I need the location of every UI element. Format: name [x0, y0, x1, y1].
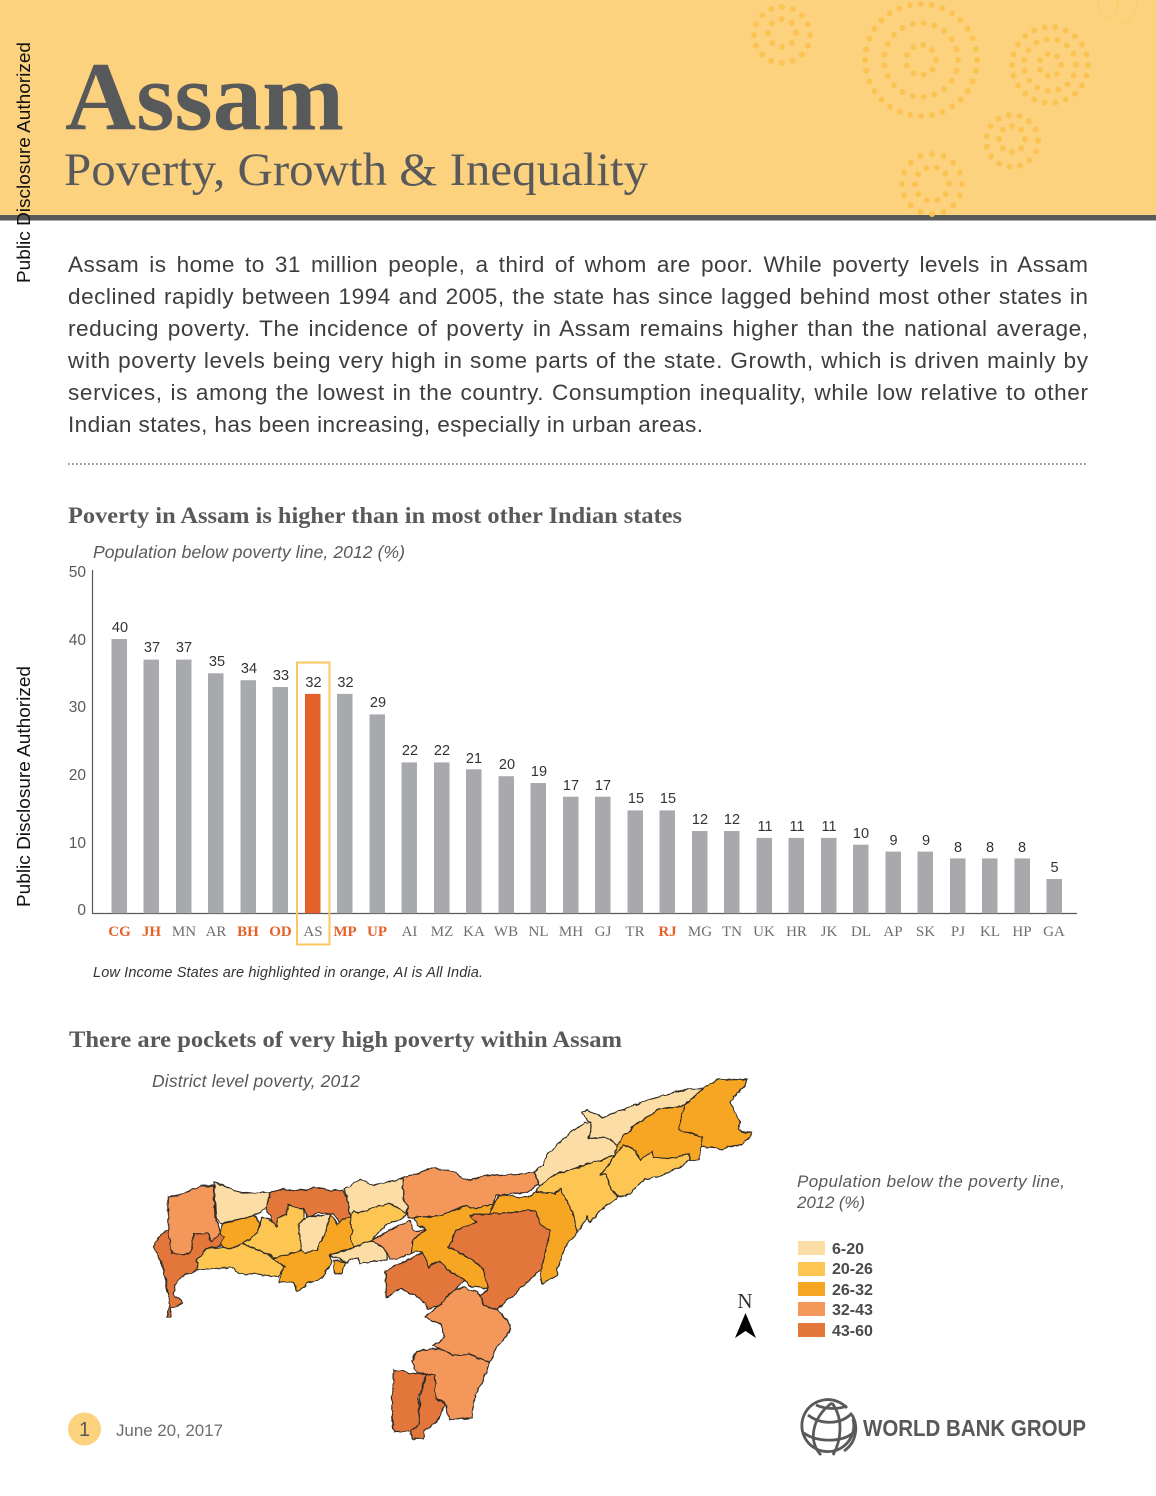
- state labels: GA: [1043, 924, 1065, 940]
- state labels: CG: [108, 924, 131, 940]
- y axis labels: 0: [77, 902, 86, 919]
- intro paragraph: Assam is home to 31 million people, a third of whom are poor. While poverty levels in Assam: [68, 252, 1088, 277]
- value labels: 22: [402, 743, 418, 759]
- icon: globe: [802, 1400, 856, 1455]
- state labels: DL: [851, 924, 871, 940]
- north arrow: [735, 1289, 756, 1338]
- value labels: 8: [1018, 840, 1026, 856]
- page number: [68, 1412, 101, 1446]
- highlight box: Assam: [297, 662, 330, 944]
- state labels: TR: [625, 924, 645, 940]
- intro paragraph: [67, 252, 1089, 437]
- decorative dotted spirals: [754, 4, 1088, 214]
- state labels: KA: [463, 924, 485, 940]
- state labels: KL: [980, 924, 1000, 940]
- state labels: TN: [722, 924, 742, 940]
- header banner: [0, 0, 1156, 220]
- value labels: 32: [337, 675, 354, 691]
- bar chart: [69, 564, 1077, 944]
- state labels: MZ: [431, 924, 453, 940]
- value labels: 37: [176, 640, 192, 656]
- legend items: 26-32: [832, 1282, 873, 1299]
- value labels: 17: [563, 778, 579, 794]
- state labels: MG: [688, 924, 712, 940]
- legend items: 20-26: [832, 1261, 873, 1278]
- state labels: PJ: [951, 924, 965, 940]
- side stamp: top: Public Disclosure Authorized: [14, 42, 34, 283]
- intro paragraph: Indian states, has been increasing, especially in urban areas.: [68, 412, 703, 437]
- value labels: 22: [434, 743, 450, 759]
- value labels: 20: [499, 757, 515, 773]
- state labels: GJ: [595, 924, 611, 940]
- legend: [796, 1172, 1065, 1340]
- value labels: 8: [986, 840, 994, 856]
- state labels: HR: [786, 924, 807, 940]
- y axis labels: 10: [69, 835, 86, 852]
- y axis labels: [69, 564, 86, 919]
- heading: poverty chart: Poverty in Assam is higher than in most other Indian states: [68, 503, 682, 528]
- legend items: 43-60: [832, 1323, 873, 1340]
- value labels: 10: [853, 826, 869, 842]
- intro paragraph: with poverty levels being very high in some parts of the state. Growth, which is driven mainly by: [67, 348, 1089, 373]
- value labels: 12: [724, 812, 740, 828]
- wordmark: WORLD BANK GROUP: [863, 1415, 1086, 1441]
- value labels: [112, 620, 1059, 876]
- value labels: 40: [112, 620, 128, 636]
- value labels: 15: [660, 791, 676, 807]
- value labels: 5: [1050, 860, 1059, 876]
- state labels: UK: [753, 924, 775, 940]
- value labels: 37: [144, 640, 160, 656]
- state labels: OD: [269, 924, 292, 940]
- north arrow: N: [737, 1289, 753, 1313]
- state labels: JH: [142, 924, 161, 940]
- state labels: MP: [333, 924, 357, 940]
- state labels: HP: [1012, 924, 1032, 940]
- value labels: 17: [595, 778, 611, 794]
- value labels: 9: [889, 833, 898, 849]
- y axis labels: 50: [69, 564, 86, 581]
- state labels: MN: [172, 924, 196, 940]
- state labels: MH: [559, 924, 583, 940]
- y axis labels: 30: [69, 699, 86, 716]
- intro paragraph: declined rapidly between 1994 and 2005, the state has since lagged behind most other states in: [68, 284, 1088, 309]
- state labels: WB: [494, 924, 518, 940]
- heading: district map: There are pockets of very high poverty within Assam: [69, 1027, 622, 1052]
- value labels: 15: [628, 791, 644, 807]
- value labels: 11: [821, 819, 837, 835]
- value labels: 8: [954, 840, 962, 856]
- bars: [112, 639, 1062, 913]
- chart subtitle: Population below poverty line, 2012 (%): [93, 542, 405, 562]
- state labels: AI: [402, 924, 417, 940]
- value labels: 29: [370, 695, 386, 711]
- value labels: 11: [789, 819, 805, 835]
- legend items: 32-43: [832, 1302, 873, 1319]
- state labels: AP: [883, 924, 903, 940]
- page number: 1: [79, 1419, 90, 1441]
- title: Assam: [65, 44, 344, 152]
- legend items: 6-20: [832, 1241, 864, 1258]
- state labels: JK: [821, 924, 838, 940]
- value labels: 33: [273, 668, 289, 684]
- y axis labels: 20: [69, 767, 86, 784]
- state labels: NL: [528, 924, 548, 940]
- y axis labels: 40: [69, 632, 86, 649]
- state labels: AR: [206, 924, 226, 940]
- value labels: 9: [922, 833, 930, 849]
- state labels: UP: [367, 924, 387, 940]
- value labels: 12: [692, 812, 708, 828]
- state labels: [108, 924, 1065, 940]
- legend items: [798, 1241, 873, 1340]
- intro paragraph: services, is among the lowest in the country. Consumption inequality, while low relative to other: [68, 380, 1088, 405]
- value labels: 34: [241, 661, 257, 677]
- legend title: Population below the poverty line,: [797, 1172, 1065, 1191]
- side stamp: bottom: Public Disclosure Authorized: [14, 666, 34, 907]
- subtitle: Poverty, Growth & Inequality: [64, 144, 649, 196]
- value labels: 32: [305, 675, 322, 691]
- value labels: 21: [466, 751, 482, 767]
- state labels: AS: [303, 924, 323, 940]
- state labels: BH: [237, 924, 259, 940]
- state labels: RJ: [658, 924, 677, 940]
- chart note: Low Income States are highlighted in orange, AI is All India.: [93, 965, 483, 981]
- intro paragraph: reducing poverty. The incidence of poverty in Assam remains higher than the national average,: [68, 316, 1088, 341]
- state labels: SK: [916, 924, 935, 940]
- legend: 2012 (%): [796, 1193, 865, 1212]
- value labels: 19: [531, 764, 547, 780]
- district map of Assam: [153, 1079, 752, 1439]
- World Bank Group logo: [802, 1400, 1086, 1455]
- value labels: 35: [209, 654, 225, 670]
- map subtitle: District level poverty, 2012: [152, 1071, 360, 1091]
- value labels: 11: [757, 819, 773, 835]
- date: June 20, 2017: [116, 1421, 223, 1440]
